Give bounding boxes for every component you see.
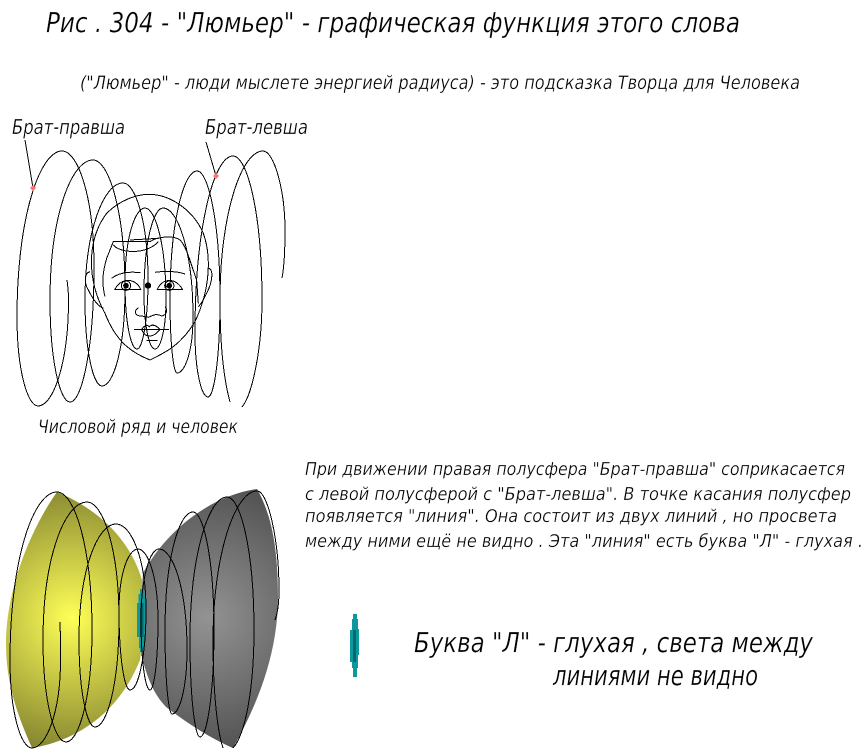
mouth xyxy=(134,325,169,340)
title: Рис . 304 - "Люмьер" - графическая функция этого слова xyxy=(46,6,740,39)
right eye xyxy=(157,280,182,289)
icon: letter Л xyxy=(350,614,359,677)
description text block xyxy=(305,459,863,552)
spiral over hemispheres xyxy=(10,491,279,748)
caption: number series and human: Числовой ряд и человек xyxy=(38,416,238,438)
figure: touching hemispheres xyxy=(6,489,279,748)
third eye dot xyxy=(145,283,151,288)
yellow hemisphere xyxy=(6,492,143,748)
nose xyxy=(135,307,167,317)
hair xyxy=(103,237,198,303)
leader lines xyxy=(25,140,216,188)
label: Брат-левша: Брат-левша xyxy=(205,115,308,139)
number spiral xyxy=(17,151,262,407)
red marker: Брат-правша xyxy=(30,185,36,191)
callout: letter Л caption: линиями не видно xyxy=(552,659,758,692)
ears xyxy=(85,268,212,308)
red marker: Брат-левша xyxy=(213,173,219,179)
label: Брат-правша: Брат-правша xyxy=(12,115,125,139)
brows xyxy=(112,271,185,278)
figure: number series and human face xyxy=(17,140,285,407)
head outline xyxy=(91,194,208,360)
grey hemisphere xyxy=(141,489,278,748)
left eye xyxy=(115,280,141,289)
letter Л on contact point xyxy=(137,589,146,652)
callout: letter Л caption xyxy=(414,626,813,692)
face xyxy=(85,194,212,360)
